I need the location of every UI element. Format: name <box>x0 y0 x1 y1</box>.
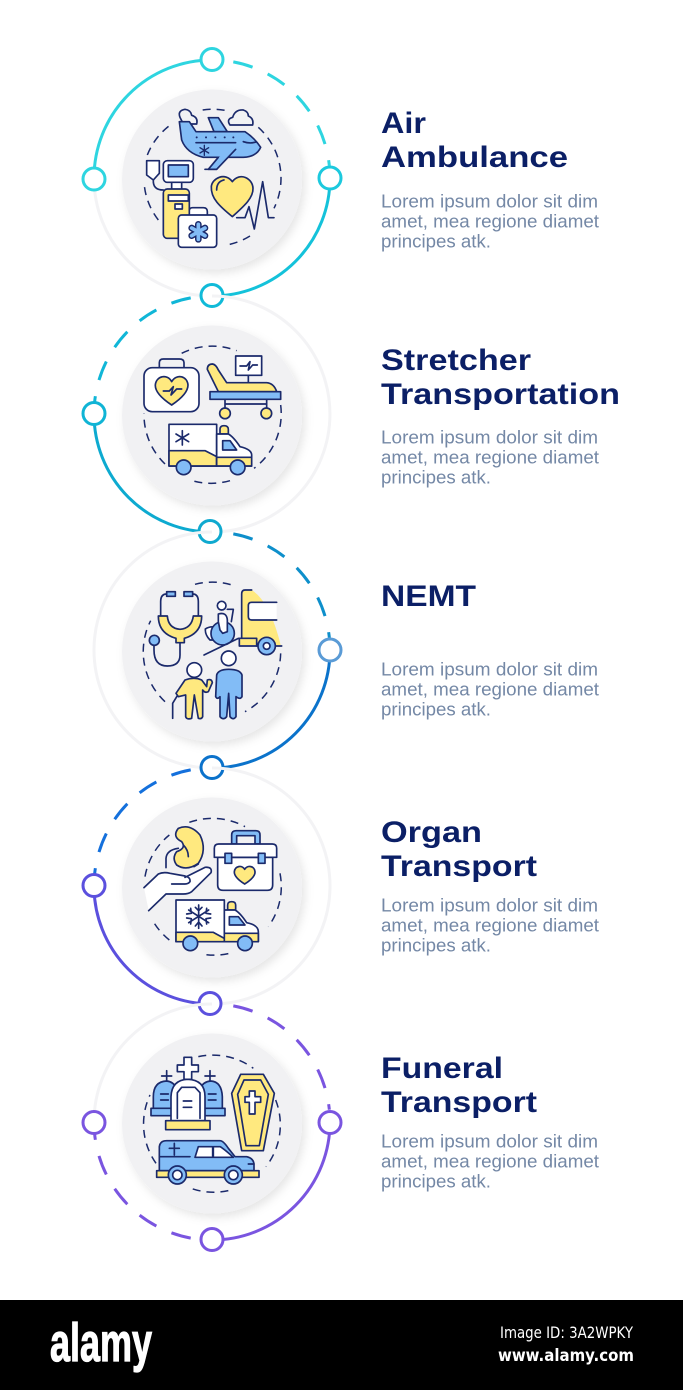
text: NEMT description: Lorem ipsum dolor sit dim <box>381 660 598 680</box>
icon: funeral transport <box>144 1055 280 1192</box>
text: organ transport description: amet, mea regione diamet <box>381 916 599 936</box>
icon: stretcher transportation <box>144 346 281 483</box>
text: air ambulance description: Lorem ipsum dolor sit dim <box>381 192 598 212</box>
panel: organ transport <box>83 768 330 1014</box>
panel: air ambulance <box>83 48 341 306</box>
text: stretcher transportation description: amet, mea regione diamet <box>381 448 599 468</box>
panel: NEMT <box>94 532 341 778</box>
image id: Image ID: 3A2WPKY <box>500 1323 633 1342</box>
logo: alamy: alamy <box>50 1313 152 1373</box>
text: organ transport description: principes atk. <box>381 936 491 956</box>
heading: funeral transport <box>381 1052 537 1119</box>
footer bar <box>0 1300 683 1390</box>
text: air ambulance description: principes atk. <box>381 232 491 252</box>
heading: NEMT: NEMT <box>381 580 476 613</box>
text: funeral transport description: Lorem ipsum dolor sit dim <box>381 1132 598 1152</box>
text: organ transport description <box>381 896 599 956</box>
text: funeral transport description: principes atk. <box>381 1172 491 1192</box>
heading: stretcher transportation: Transportation <box>381 378 620 411</box>
text: stretcher transportation description <box>381 428 599 488</box>
text: NEMT description: principes atk. <box>381 700 491 720</box>
icon: air ambulance <box>144 109 281 247</box>
text: stretcher transportation description: principes atk. <box>381 468 491 488</box>
ring: NEMT <box>201 534 341 778</box>
ring: stretcher transportation <box>83 298 221 542</box>
heading: air ambulance <box>381 107 568 174</box>
text: funeral transport description: amet, mea regione diamet <box>381 1152 599 1172</box>
heading: funeral transport: Funeral <box>381 1052 503 1085</box>
text: air ambulance description <box>381 192 599 252</box>
ring: air ambulance <box>83 48 341 306</box>
heading: organ transport: Transport <box>381 850 537 883</box>
panel: funeral transport <box>83 1004 341 1250</box>
heading: organ transport <box>381 816 537 883</box>
text: NEMT description: amet, mea regione diamet <box>381 680 599 700</box>
icon: NEMT <box>143 582 282 719</box>
text: funeral transport description <box>381 1132 599 1192</box>
ring: funeral transport <box>83 1006 341 1250</box>
website: www.alamy.com <box>498 1346 634 1366</box>
heading: stretcher transportation: Stretcher <box>381 344 531 377</box>
text: stretcher transportation description: Lorem ipsum dolor sit dim <box>381 428 598 448</box>
heading: funeral transport: Transport <box>381 1086 537 1119</box>
text: organ transport description: Lorem ipsum dolor sit dim <box>381 896 598 916</box>
heading: organ transport: Organ <box>381 816 482 849</box>
text: air ambulance description: amet, mea regione diamet <box>381 212 599 232</box>
text: NEMT description <box>381 660 599 720</box>
heading: air ambulance: Ambulance <box>381 141 568 174</box>
heading: air ambulance: Air <box>381 107 426 140</box>
icon: organ transport <box>144 818 281 955</box>
panel: stretcher transportation <box>83 296 330 542</box>
heading: stretcher transportation <box>381 344 620 411</box>
ring: organ transport <box>83 770 221 1014</box>
